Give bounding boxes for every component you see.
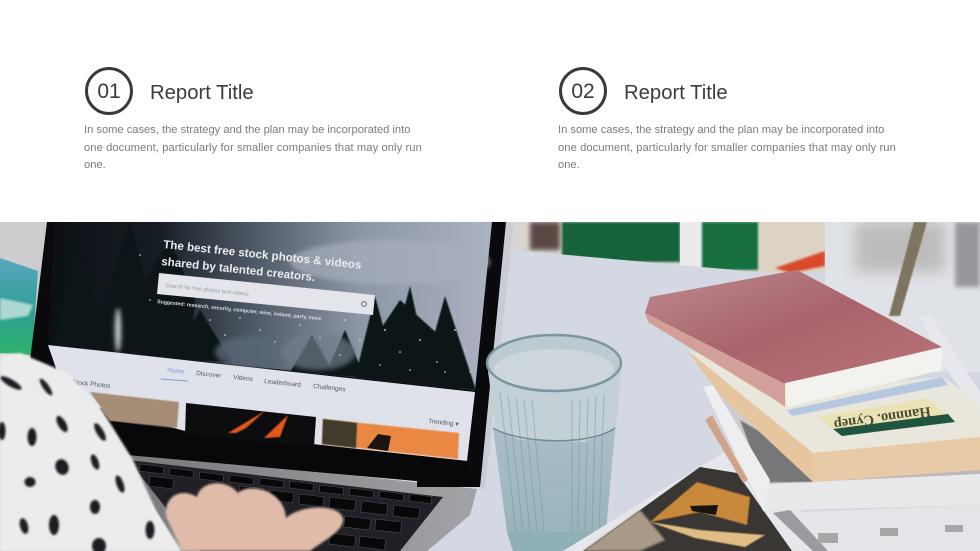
top book white pages [785, 348, 942, 407]
body text 2: one document, particularly for smaller companies that may only run [558, 142, 896, 154]
glass of water [487, 335, 622, 551]
bottom book [773, 505, 980, 551]
clear acrylic stand [920, 314, 980, 415]
report block 1 [84, 67, 422, 171]
photo: laptop, glass of water and stacked books on a desk [0, 222, 980, 551]
screen thumbnail brown [90, 392, 179, 428]
screen forest image [48, 222, 492, 390]
number badge 02: 02 [571, 80, 595, 103]
screen thumbnail orange [322, 419, 459, 459]
body text 1: one document, particularly for smaller companies that may only run [84, 142, 422, 154]
screen navigation text: Stock Photos [72, 379, 111, 390]
screen headline: shared by talented creators. [161, 255, 316, 284]
screen navigation text: Challenges [313, 383, 347, 393]
screen search bar [157, 273, 375, 315]
third book, gray pages [703, 387, 980, 511]
laptop screen bezel [30, 222, 512, 487]
number badge 01 [85, 67, 133, 115]
polka dot sleeve [0, 353, 182, 551]
screen navigation text: Leaderboard [264, 378, 302, 389]
number badge 02 [559, 67, 607, 115]
snow specks [139, 254, 471, 373]
hand on keyboard [166, 483, 343, 551]
screen navigation text: Videos [233, 374, 254, 383]
screen navigation text: Discover [196, 370, 222, 380]
book label: Hannno. Cyneр [833, 403, 932, 432]
laptop keyboard deck [120, 450, 477, 551]
screen navigation text [72, 367, 460, 428]
left book, teal and green [0, 258, 38, 355]
screen navigation text: Home [167, 367, 185, 376]
screen thumbnail dark with flame [185, 403, 316, 447]
laptop: Suggested: research, security, computer, wine, ireland, party, more [157, 299, 322, 322]
screen headline: The best free stock photos & videos [163, 238, 362, 272]
book label [818, 398, 955, 436]
body text 2 [558, 124, 896, 171]
forest trees [55, 222, 476, 390]
snowy mist on trees [115, 240, 490, 370]
screen content panel [48, 345, 475, 461]
body text 1: In some cases, the strategy and the plan may be incorporated into [84, 124, 410, 136]
sleeve dots [0, 374, 154, 551]
black band under thumbnails [110, 421, 480, 487]
second book, cream cover with tan edge [687, 350, 980, 453]
screen navigation text: Trending ▾ [428, 418, 460, 428]
laptop: Search for free photos and videos [165, 283, 249, 298]
stack of books [645, 270, 980, 551]
report block 2 [558, 67, 896, 171]
background: desk and wall [0, 222, 980, 551]
heading 1: Report Title [150, 82, 254, 104]
body text 1: one. [84, 159, 106, 171]
magazine under the books [563, 450, 816, 551]
number badge 01: 01 [97, 80, 121, 103]
top book, rose cover [645, 270, 942, 384]
body text 2: one. [558, 159, 580, 171]
body text 1 [84, 124, 422, 171]
heading 2: Report Title [624, 82, 728, 104]
body text 2: In some cases, the strategy and the plan may be incorporated into [558, 124, 884, 136]
glass ribs [500, 392, 604, 532]
keyboard keys [139, 464, 432, 550]
laptop [30, 222, 514, 551]
